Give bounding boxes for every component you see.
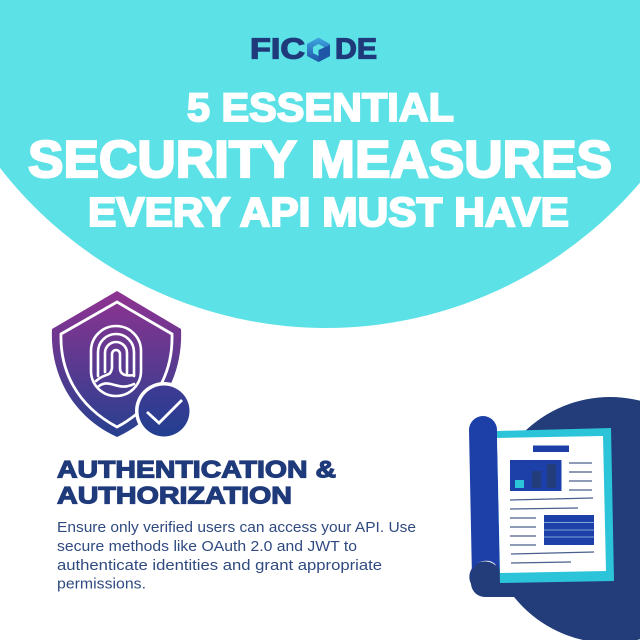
text lines (510, 463, 594, 563)
table block (544, 515, 594, 545)
title line 3: EVERY API MUST HAVE (88, 189, 569, 235)
illustration: document on navy circle (469, 397, 640, 640)
cyan header circle (0, 0, 640, 328)
document title bar (533, 446, 569, 452)
document page (497, 436, 606, 573)
scroll roll (469, 416, 500, 578)
logo: FICODE: DE (335, 34, 377, 66)
logo: FICODE: FIC (250, 34, 305, 66)
body text: authenticate identities and grant appropriate (57, 557, 382, 574)
body text: secure methods like OAuth 2.0 and JWT to (57, 538, 357, 555)
check badge (135, 382, 193, 440)
body text: Ensure only verified users can access your API. Use (57, 519, 416, 536)
title (28, 86, 612, 235)
body text: permissions. (57, 576, 146, 592)
logo hexagon mark (307, 38, 330, 62)
title line 2: SECURITY MEASURES (28, 131, 612, 189)
navy circle (487, 397, 640, 640)
logo: FICODE (250, 34, 377, 66)
body text (57, 519, 416, 592)
heading line 2: AUTHORIZATION (57, 482, 292, 510)
shield (52, 291, 181, 437)
roll base (469, 561, 525, 597)
fingerprint (91, 326, 141, 396)
title line 1: 5 ESSENTIAL (187, 86, 454, 130)
heading line 1: AUTHENTICATION & (57, 456, 336, 484)
heading (57, 456, 336, 510)
chart block (510, 460, 562, 491)
shield inner outline (61, 302, 172, 427)
icon: fingerprint shield with check badge (52, 291, 193, 440)
document cyan frame (497, 428, 614, 583)
